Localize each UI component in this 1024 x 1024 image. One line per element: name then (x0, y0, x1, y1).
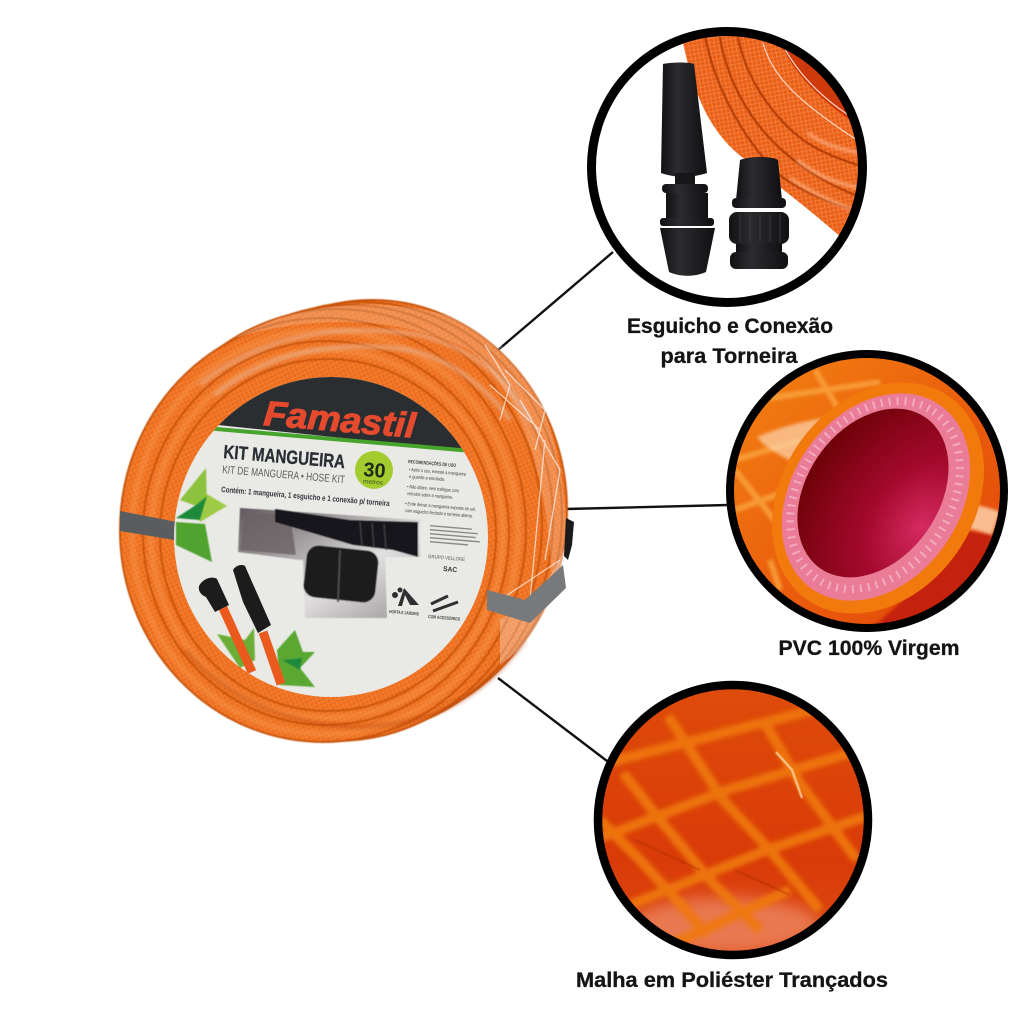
usage recommendations: e guarde-a enrolada. (409, 474, 445, 483)
product subtitle: KIT DE MANGUERA • HOSE KIT (222, 464, 346, 486)
small hose 2 (263, 632, 281, 684)
right knot (564, 518, 574, 560)
leaves left (176, 468, 227, 562)
product title: KIT MANGUEIRA (223, 442, 346, 473)
plastic wrap (235, 304, 567, 665)
hose connector (729, 157, 789, 269)
usage recommendations: com esguicho fechado e torneira aberta. (405, 508, 473, 520)
dark lower hose (876, 530, 993, 624)
badge: 30 metros: 30 (363, 459, 386, 483)
SAC contact: SAC (443, 566, 457, 574)
pink ring (782, 393, 970, 601)
right strap (487, 565, 566, 623)
coiled hose (683, 36, 858, 236)
ring (592, 32, 862, 302)
highlight band (970, 504, 998, 536)
mesh lattice (600, 710, 870, 950)
accessories caption: COM ACESSÓRIOS (428, 612, 460, 622)
small connector 1 (199, 578, 229, 612)
ring sheen (132, 330, 518, 734)
callout circle: PVC cross-section (726, 350, 1008, 632)
glint (776, 752, 802, 798)
badge: 30 metros: metros (363, 479, 383, 487)
fine print block (430, 525, 480, 546)
lower shadow (185, 640, 525, 727)
top pale arcs (200, 330, 530, 420)
blister tray (238, 508, 420, 618)
usage recommendations: veículos sobre a mangueira. (407, 491, 453, 501)
garden caption: HORTA E JARDINS (389, 609, 419, 617)
usage recommendations (405, 458, 476, 520)
orange rim (772, 382, 984, 614)
small nozzle 2 (233, 565, 271, 633)
pale lower haze (630, 897, 820, 953)
scratches (635, 840, 790, 895)
connector line: PVC (566, 505, 728, 509)
label disc (170, 370, 495, 700)
usage recommendations: • Após o uso, enrosté a mangueira (409, 467, 466, 478)
callout circle: nozzle and connector (587, 27, 867, 307)
hole (797, 408, 949, 578)
group logo: GRUPO VELLORE (428, 554, 466, 563)
contents line: Contém: 1 mangueira, 1 esguicho e 1 conexão p/ torneira (221, 485, 390, 508)
ring (598, 685, 868, 955)
ring (730, 354, 1004, 628)
caption: mesh: Malha em Poliéster Trançados (576, 969, 888, 992)
dark header (218, 377, 464, 451)
connector line: mesh (498, 678, 607, 761)
callout circle: polyester mesh (598, 685, 870, 955)
product: hose coil (120, 300, 574, 742)
mesh lines (735, 370, 880, 590)
leaves bottom (217, 628, 315, 687)
usage recommendations: • Evite deixar a mangueira exposta ao sol, (405, 501, 476, 513)
icon: garden (392, 588, 419, 606)
usage recommendations: RECOMENDAÇÕES DE USO (408, 458, 456, 469)
left strap (120, 511, 182, 541)
caption: PVC: PVC 100% Virgem (778, 637, 960, 660)
gloss patch (757, 418, 825, 463)
badge: 30 metros (355, 451, 393, 489)
brand logo: Famastil (262, 394, 418, 446)
caption: fittings: para Torneira (660, 345, 798, 368)
coil loops (120, 300, 567, 742)
usage recommendations: • Não dobre, nem trafegue com (407, 484, 459, 494)
small hose 1 (223, 608, 252, 672)
nozzle (660, 62, 715, 276)
icon: accessories (431, 596, 458, 611)
connector line: fittings (498, 252, 613, 350)
caption: fittings: Esguicho e Conexão (627, 315, 833, 338)
caption: fittings (627, 315, 833, 368)
green stripe (214, 427, 464, 452)
